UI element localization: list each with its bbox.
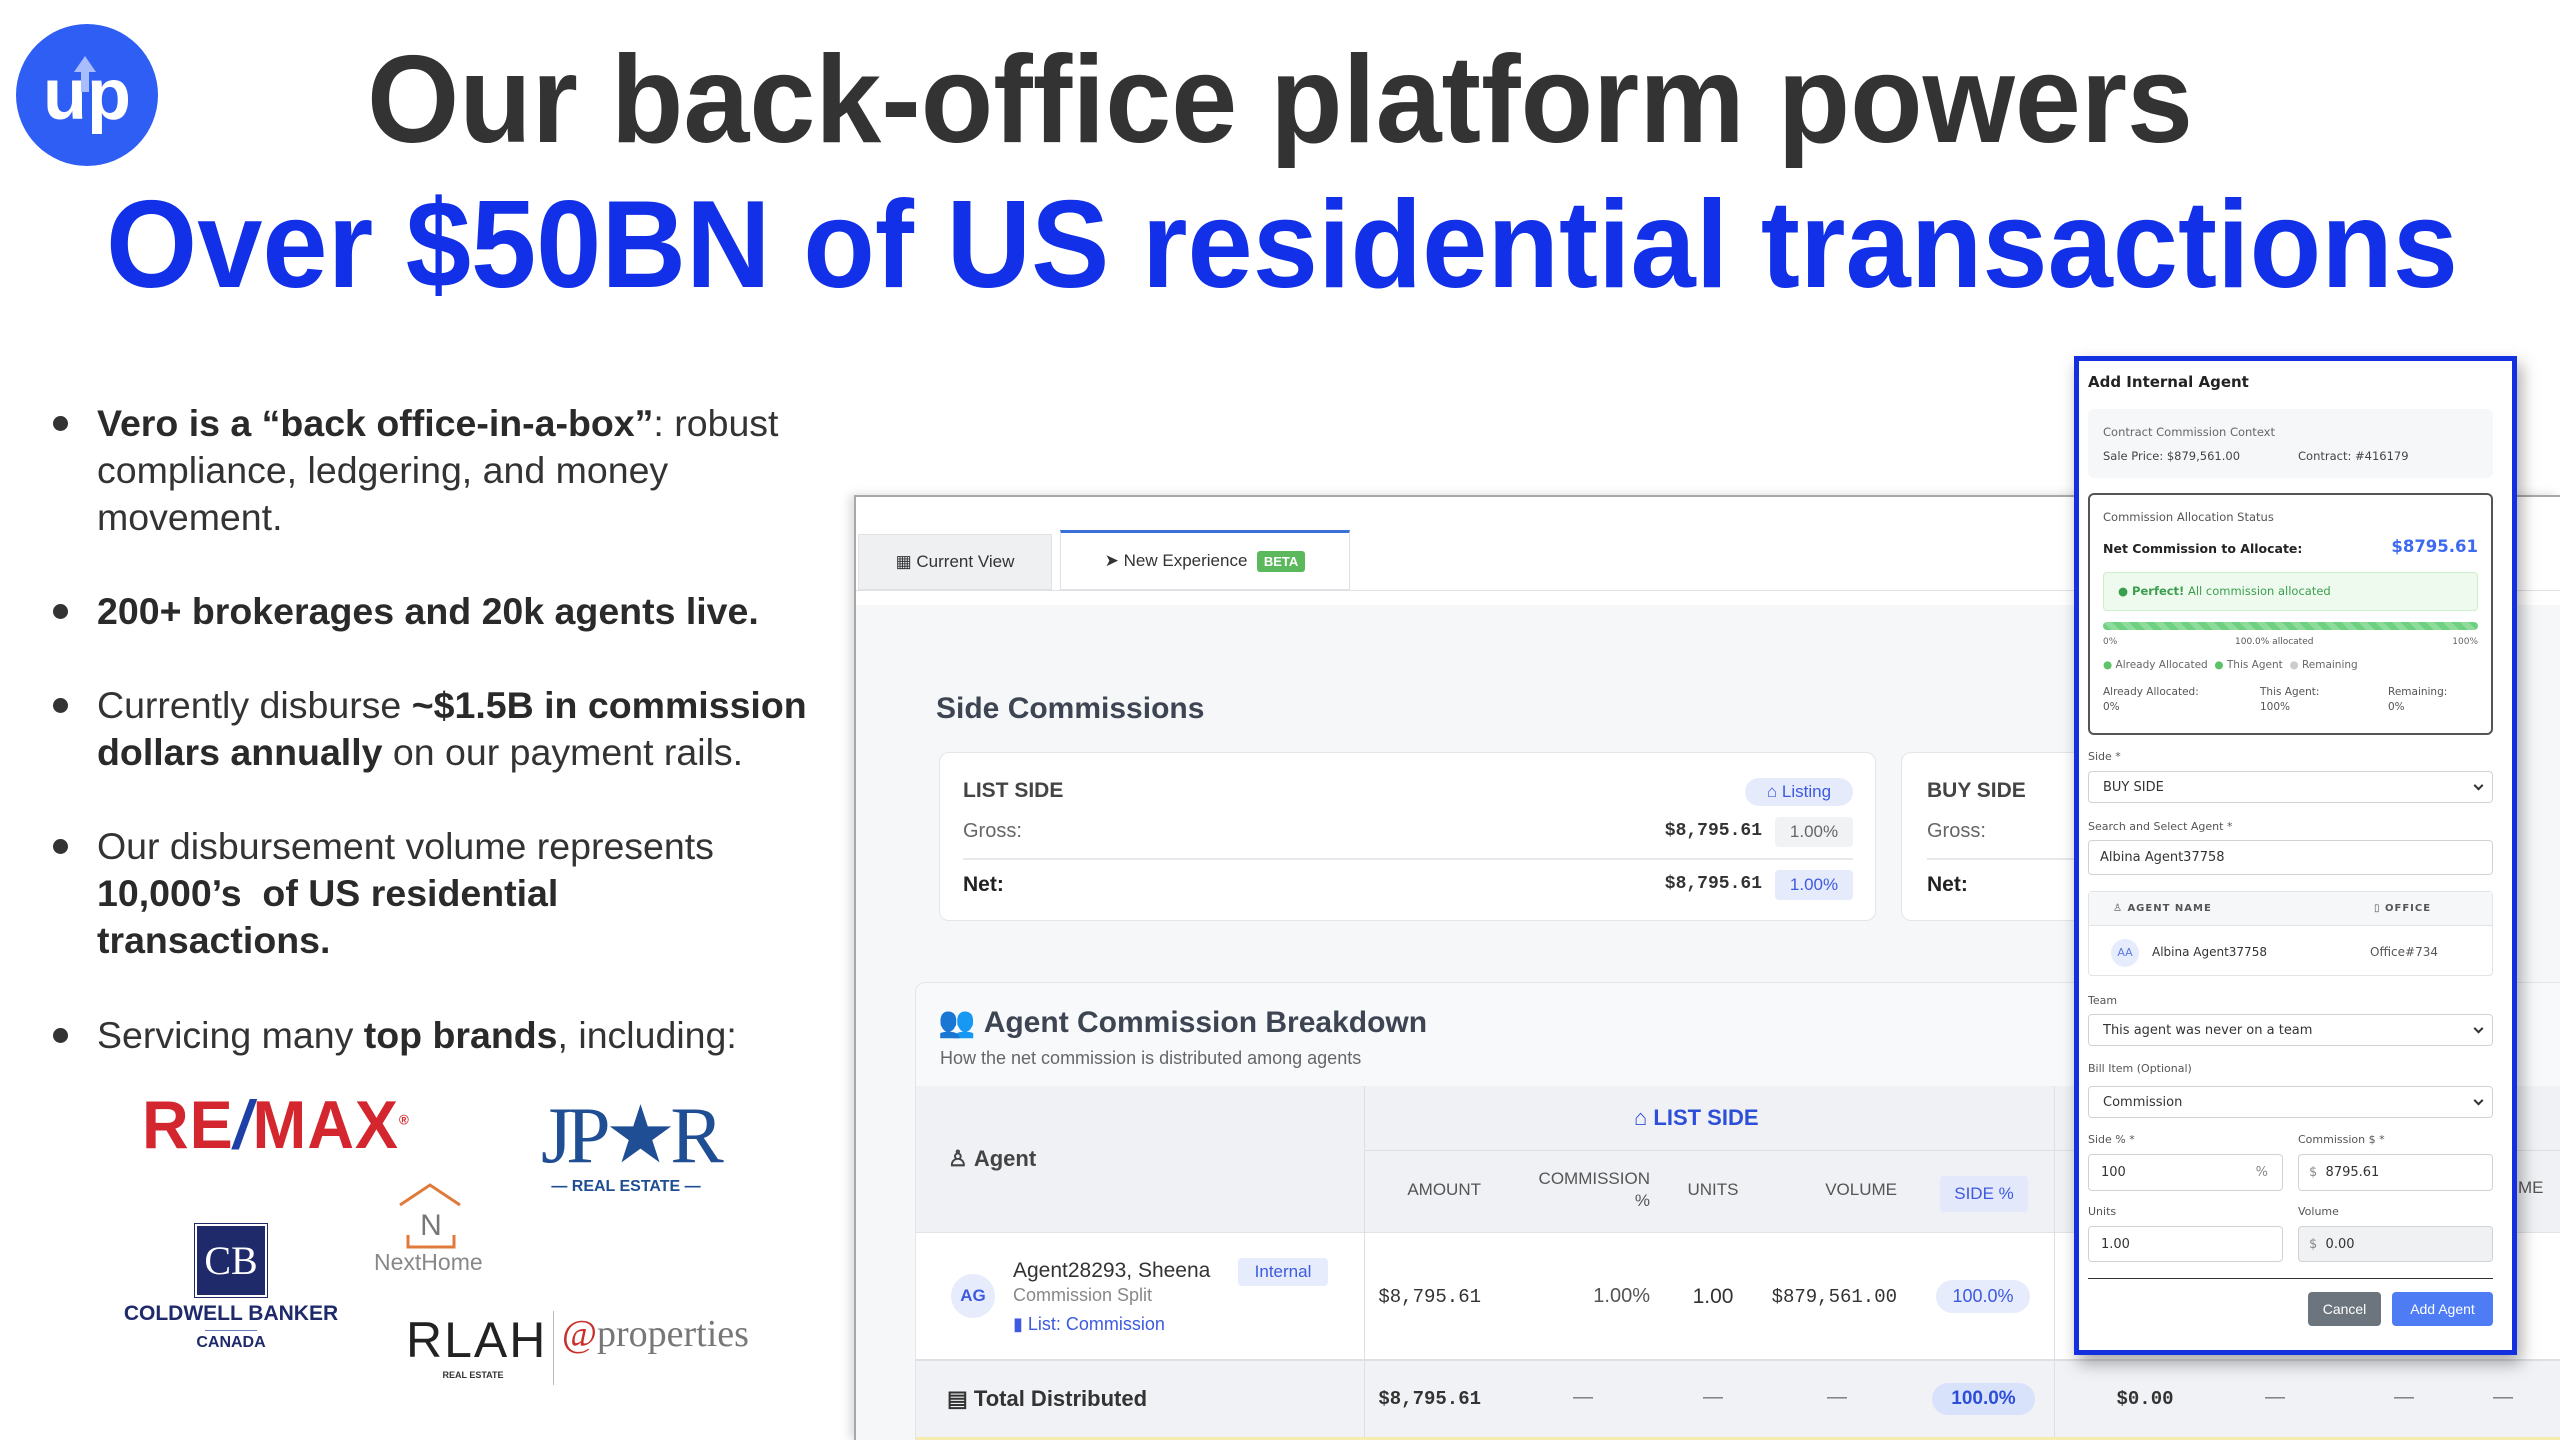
bullet 2: 200+ brokerages and 20k agents live.: [97, 590, 759, 632]
allocation status box: Commission Allocation Status: [2103, 510, 2274, 524]
logo: up circle: up: [43, 55, 131, 135]
panel: app screenshot: Agent28293, Sheena: [1013, 1259, 1210, 1282]
logo: Coldwell Banker Canada: COLDWELL BANKER: [124, 1302, 338, 1325]
allocation status box: 0%: [2103, 701, 2120, 713]
logo: NextHome: NextHome: [374, 1249, 483, 1275]
panel: app screenshot: —: [1573, 1386, 1593, 1408]
allocation status box: 100%: [2260, 701, 2290, 713]
heading: side commissions: Side Commissions: [936, 692, 1204, 725]
tab: new experience: ➤ New Experience: [1105, 551, 1247, 570]
modal: add internal agent: Albina Agent37758: [2100, 850, 2225, 865]
agent result table: Albina Agent37758: [2152, 945, 2267, 959]
panel: app screenshot: ME: [2518, 1178, 2544, 1197]
modal: add internal agent: Volume: [2298, 1205, 2339, 1218]
bullet 3: dollars annually on our payment rails.: [97, 731, 743, 773]
panel: app screenshot: Internal: [1255, 1262, 1311, 1281]
card: list side: $8,795.61: [1665, 874, 1762, 894]
title: Over $50BN of US residential transactions: [106, 176, 2458, 314]
modal: add internal agent: Commission: [2103, 1094, 2182, 1110]
allocation status box: ● Perfect! All commission allocated: [2118, 584, 2331, 598]
modal title: Add Internal Agent: [2088, 373, 2249, 391]
panel: app screenshot: —: [1703, 1386, 1723, 1408]
logo: NextHome: [374, 1183, 483, 1275]
table header: agent: ♙ Agent: [948, 1146, 1036, 1171]
modal: add internal agent: Contract: #416179: [2298, 449, 2409, 463]
agent result table: ▯ OFFICE: [2374, 903, 2431, 914]
card: buy side: [1901, 752, 2401, 921]
modal: add internal agent: $: [2309, 1236, 2317, 1252]
agent row: [951, 1274, 995, 1318]
card: buy side: Net:: [1927, 873, 1968, 896]
card: list side: 1.00%: [1790, 822, 1838, 841]
card: list side: Gross:: [963, 820, 1022, 842]
bullet 1: movement.: [97, 496, 282, 538]
total row: ▤ Total Distributed: [947, 1386, 1147, 1411]
panel: app screenshot: —: [1827, 1386, 1847, 1408]
panel: app screenshot: VOLUME: [1825, 1180, 1897, 1199]
bullet 4: [97, 823, 714, 964]
column headers: AMOUNT: [1407, 1180, 1481, 1199]
panel: app screenshot: UNITS: [1688, 1180, 1738, 1199]
modal: add internal agent: 1.00: [2101, 1236, 2130, 1252]
allocation status box: $8795.61: [2391, 537, 2478, 556]
agent row: AG: [960, 1286, 986, 1305]
bullet 4: 10,000’s of US residential: [97, 872, 558, 914]
field: bill item: Bill Item (Optional): [2088, 1062, 2192, 1075]
allocation status box: Remaining:: [2388, 686, 2447, 698]
panel: app screenshot: $879,561.00: [1772, 1286, 1897, 1308]
panel: app screenshot: COMMISSION: [1539, 1169, 1650, 1188]
bullet 1: compliance, ledgering, and money: [97, 449, 668, 491]
bullet 5: Servicing many top brands, including:: [97, 1014, 737, 1056]
panel: app screenshot: —: [2394, 1386, 2414, 1408]
buttons: [2308, 1292, 2381, 1326]
bullet 1: [97, 400, 778, 541]
card: buy side: Gross:: [1927, 820, 1986, 842]
fields: side % and commission: Side % *: [2088, 1133, 2135, 1146]
bullet 1: Vero is a “back office-in-a-box”: robust: [97, 402, 778, 444]
panel: agent commission breakdown: How the net commission is distributed among agents: [940, 1048, 1361, 1068]
card: list side: Net:: [963, 873, 1004, 896]
logo: Coldwell Banker Canada: CANADA: [196, 1334, 266, 1351]
modal: add internal agent: 100: [2101, 1165, 2126, 1180]
modal: add internal agent: Sale Price: $879,561.00: [2103, 449, 2240, 463]
logo: up circle: [16, 24, 158, 166]
logo: RLAH: REAL ESTATE: [442, 1370, 504, 1380]
panel: app screenshot: 1.00%: [1593, 1285, 1650, 1307]
card: list side: LIST SIDE: [963, 779, 1063, 802]
allocation status box: Net Commission to Allocate:: [2103, 541, 2302, 556]
card: list side: ⌂ Listing: [1767, 782, 1831, 801]
allocation status box: [2088, 493, 2493, 735]
tab: current view: [858, 534, 1052, 590]
card: list side: $8,795.61: [1665, 821, 1762, 841]
modal: add internal agent: Commission $ *: [2298, 1133, 2385, 1146]
logo: JPAR: — REAL ESTATE —: [551, 1178, 701, 1195]
panel: app screenshot: —: [2493, 1386, 2513, 1408]
title: Our back-office platform powers: [367, 31, 2193, 169]
field: team: Team: [2088, 994, 2117, 1007]
tabs: [858, 530, 1350, 590]
panel: app screenshot: 100.0%: [1952, 1286, 2014, 1306]
modal: add internal agent: %: [2256, 1165, 2268, 1180]
logo: RE/MAX: RE/MAX®: [142, 1087, 410, 1163]
buttons: Cancel: [2323, 1301, 2366, 1317]
logo: Coldwell Banker Canada: CB: [204, 1238, 258, 1283]
panel: app screenshot: SIDE %: [1954, 1184, 2014, 1203]
card: list side: 1.00%: [1790, 875, 1838, 894]
modal: add internal agent: $: [2309, 1165, 2317, 1180]
allocation status box: 100%: [2452, 637, 2478, 647]
fields: units and volume: Units: [2088, 1205, 2116, 1218]
agent result table: AA: [2117, 946, 2133, 959]
allocation status box: Already Allocated:: [2103, 686, 2199, 698]
field: side: Side *: [2088, 750, 2121, 763]
modal: add internal agent: 0.00: [2326, 1236, 2354, 1252]
card: buy side: BUY SIDE: [1927, 779, 2026, 802]
bullet 4: Our disbursement volume represents: [97, 825, 714, 867]
heading: 👥 Agent Commission Breakdown: [938, 1006, 1427, 1039]
modal: add internal agent: 8795.61: [2326, 1165, 2379, 1180]
modal: add internal agent: Add Agent: [2410, 1301, 2475, 1317]
allocation status box: 0%: [2388, 701, 2405, 713]
panel: app screenshot: Commission Split: [1013, 1285, 1152, 1305]
tab: new experience: [1060, 530, 1350, 590]
title: [106, 31, 2458, 314]
panel: app screenshot: $0.00: [2116, 1388, 2174, 1410]
panel: app screenshot: 100.0%: [1951, 1388, 2016, 1409]
panel: app screenshot: ▮ List: Commission: [1013, 1314, 1165, 1334]
panel: app screenshot: [854, 495, 2560, 1440]
logo: RLAH: RLAH: [406, 1312, 547, 1368]
tab: current view: ▦ Current View: [896, 552, 1014, 571]
panel: app screenshot: 1.00: [1693, 1285, 1733, 1308]
modal: add internal agent: BUY SIDE: [2103, 780, 2164, 794]
allocation status box: 100.0% allocated: [2235, 637, 2313, 647]
bullet 3: [97, 682, 807, 776]
logo: @properties: @properties: [562, 1313, 749, 1355]
agent result table: [2088, 891, 2493, 976]
panel: app screenshot: $8,795.61: [1378, 1388, 1481, 1410]
agent result table: Office#734: [2370, 945, 2438, 959]
logo: JPAR: JP★R: [541, 1092, 718, 1180]
tab: new experience: BETA: [1264, 554, 1298, 568]
logo: NextHome: N: [420, 1209, 442, 1242]
field: search agent: Search and Select Agent *: [2088, 820, 2232, 833]
allocation status box: This Agent:: [2260, 686, 2319, 698]
context box: [2088, 409, 2493, 478]
modal: add internal agent: [2074, 356, 2517, 1355]
panel: app screenshot: $8,795.61: [1378, 1286, 1481, 1308]
agent result table: ♙ AGENT NAME: [2113, 903, 2212, 914]
panel: agent commission breakdown: [915, 982, 2560, 1440]
panel: app screenshot: —: [2265, 1386, 2285, 1408]
allocation status box: ● Already Allocated ● This Agent ● Remaining: [2103, 659, 2358, 671]
logo: Coldwell Banker Canada: [124, 1223, 338, 1351]
panel: app screenshot: %: [1635, 1191, 1650, 1210]
modal: add internal agent: Contract Commission Context: [2103, 425, 2275, 439]
table: [916, 1086, 2560, 1440]
table header: list side: ⌂ LIST SIDE: [1634, 1105, 1759, 1130]
bullet 4: transactions.: [97, 919, 330, 961]
card: list side: [939, 752, 1876, 921]
allocation status box: 0%: [2103, 637, 2117, 647]
bullet 3: Currently disburse ~$1.5B in commission: [97, 684, 807, 726]
modal: add internal agent: This agent was never on a team: [2103, 1022, 2312, 1038]
